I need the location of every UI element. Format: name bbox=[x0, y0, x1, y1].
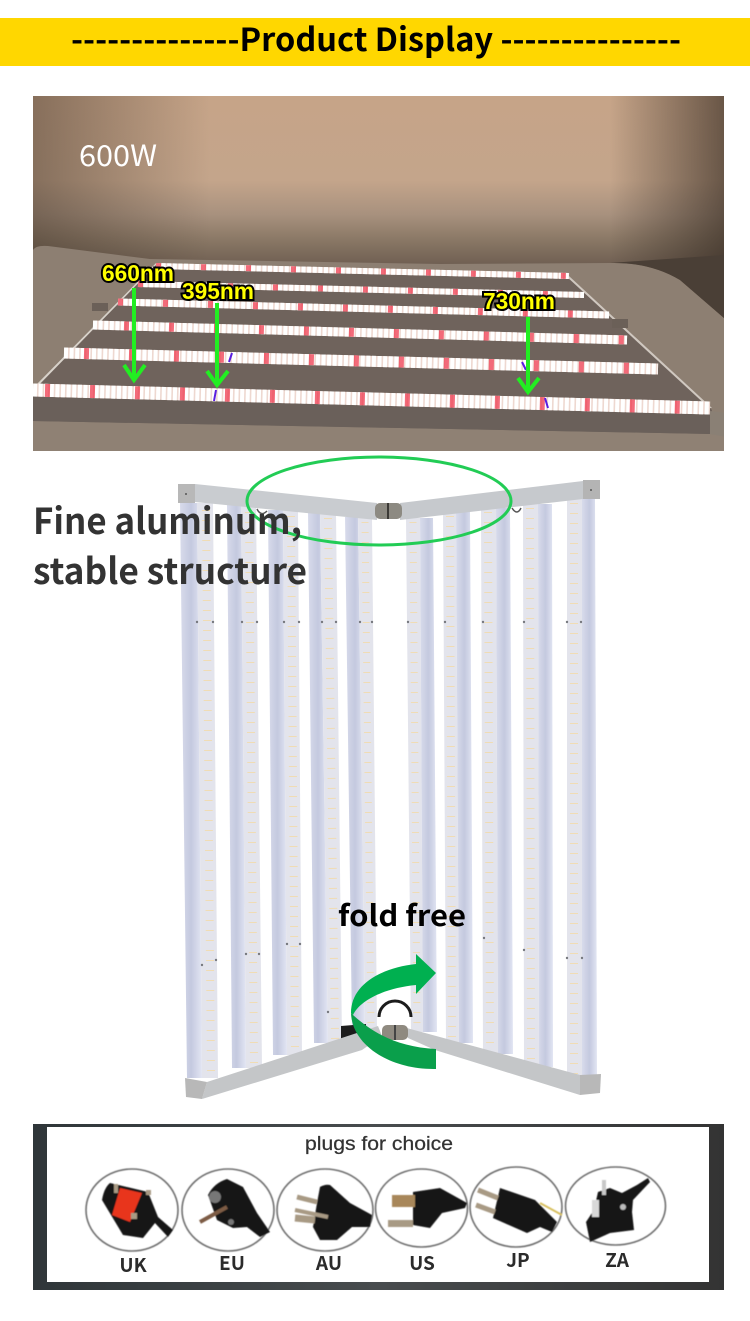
header banner bbox=[0, 15, 750, 66]
panel: 600W lit photo bbox=[33, 96, 727, 451]
brackets bbox=[92, 303, 108, 311]
icon: ZA plug bbox=[566, 1167, 666, 1245]
arrow: 395nm bbox=[182, 278, 254, 385]
right bars bbox=[406, 499, 597, 1077]
icon: AU plug bbox=[277, 1169, 373, 1251]
plug labels: US bbox=[409, 1249, 435, 1276]
plug labels: AU bbox=[315, 1249, 342, 1276]
plug labels: ZA bbox=[605, 1246, 630, 1273]
heading: Fine aluminum, stable structure: Fine aluminum, bbox=[33, 493, 302, 545]
icon: UK plug bbox=[86, 1169, 178, 1251]
arrow: 730nm: 730nm bbox=[483, 288, 555, 314]
heading: plugs for choice: plugs for choice bbox=[305, 1133, 453, 1155]
arrow: 395nm: 395nm bbox=[182, 278, 254, 304]
mattress surface bbox=[33, 246, 724, 412]
plug labels: EU bbox=[219, 1249, 245, 1276]
left bars bbox=[180, 503, 377, 1078]
plug labels: UK bbox=[119, 1251, 148, 1278]
screws bbox=[196, 621, 583, 1013]
LED strips bbox=[33, 266, 710, 408]
title: --------------Product Display --------------- bbox=[71, 15, 681, 61]
icon: US plug bbox=[376, 1169, 468, 1247]
bottom rail bbox=[185, 1001, 601, 1099]
arrow: 730nm bbox=[483, 288, 555, 392]
label: 600W: 600W bbox=[79, 133, 157, 175]
panel: plugs for choice bbox=[33, 1124, 724, 1290]
light panel troughs bbox=[33, 263, 712, 434]
icon: JP plug bbox=[470, 1167, 562, 1247]
callout ellipse: hinge bbox=[247, 457, 511, 545]
top rail bbox=[178, 480, 600, 520]
plug labels bbox=[119, 1246, 630, 1278]
icon: EU plug bbox=[182, 1169, 274, 1251]
panel: folded aluminium light bbox=[178, 480, 601, 1099]
label: fold free: fold free bbox=[338, 893, 466, 935]
arrow: fold direction bbox=[351, 954, 436, 1069]
plug labels: JP bbox=[506, 1246, 530, 1273]
arrow: 660nm: 660nm bbox=[102, 260, 174, 286]
heading: Fine aluminum, stable structure: stable structure bbox=[33, 543, 307, 595]
arrow: 660nm bbox=[102, 260, 174, 380]
heading: Fine aluminum, stable structure bbox=[33, 493, 307, 595]
